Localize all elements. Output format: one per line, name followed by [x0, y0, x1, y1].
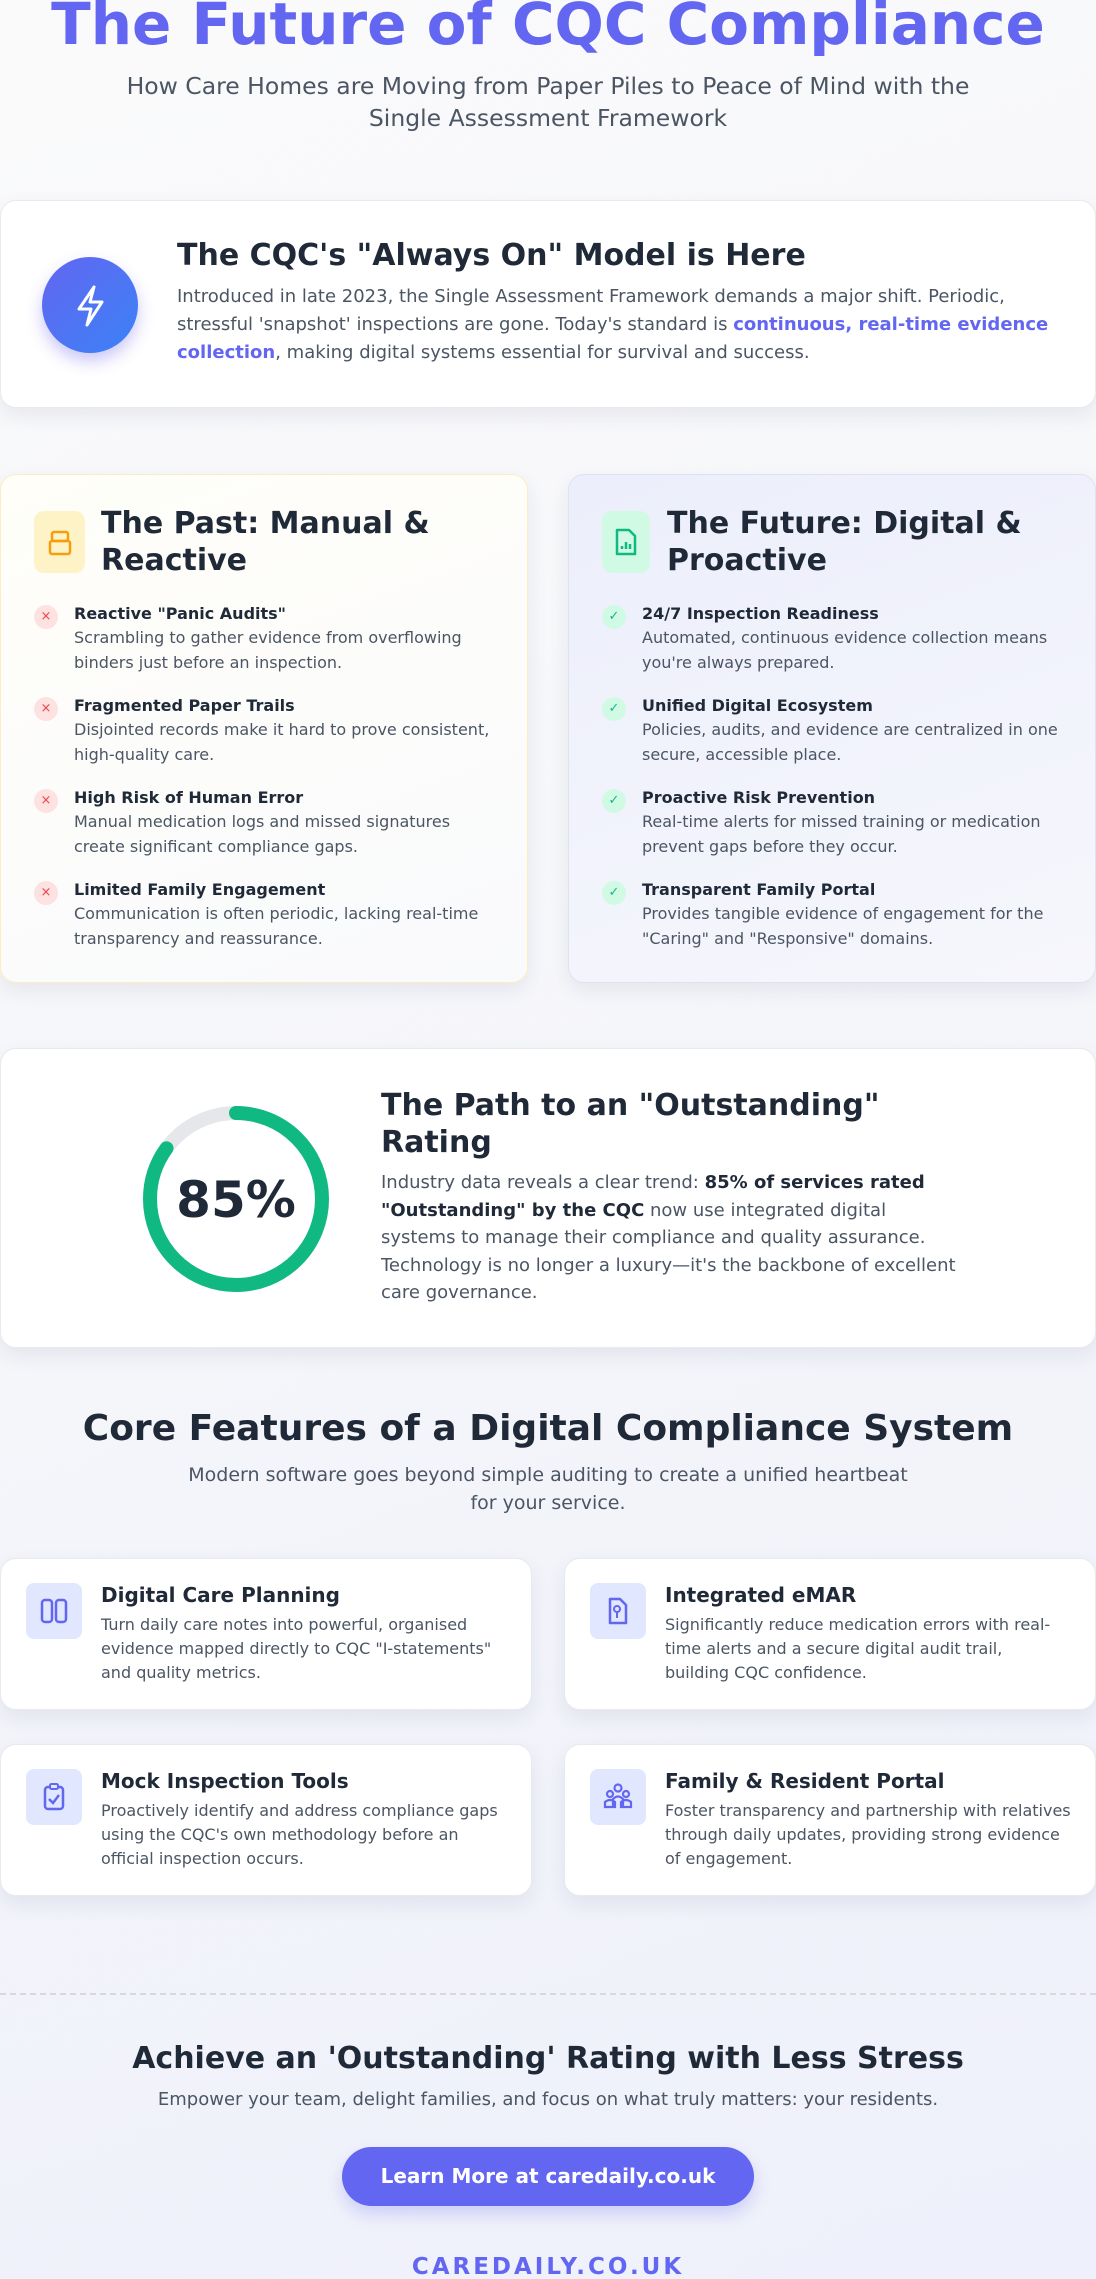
- item: Communication is often periodic, lacking real-time transparency and reassurance.: [74, 904, 478, 948]
- feature card: family portal: Foster transparency and partnership with relatives through daily updates, providing strong evidence of engagement.: [665, 1801, 1071, 1868]
- item: ✓: [609, 701, 619, 716]
- icon: archive: [34, 511, 85, 573]
- feature card: digital care planning: Digital Care Planning: [101, 1583, 340, 1607]
- item: ×: [41, 701, 51, 716]
- chart: 85% ring: 85%: [176, 1171, 296, 1229]
- feature card: mock inspection: [0, 1744, 532, 1896]
- feature card: digital care planning: Turn daily care notes into powerful, organised evidence mapped directly to CQC "I-statements" and quality metrics.: [101, 1615, 491, 1682]
- item: Provides tangible evidence of engagement for the "Caring" and "Responsive" domains.: [642, 904, 1043, 948]
- cta button: [342, 2147, 754, 2206]
- item: [34, 696, 489, 764]
- body text: Introduced in late 2023, the Single Assessment Framework demands a major shift. Periodic, stressful 'snapshot' inspections are gone. Today's standard is continuous, real-time evidence collection, making digital systems essential for survival and success.: [177, 286, 1048, 363]
- item: [602, 604, 1047, 672]
- panel: the past: [0, 474, 528, 983]
- item: Policies, audits, and evidence are centralized in one secure, accessible place.: [642, 720, 1058, 764]
- cta subtext: Empower your team, delight families, and focus on what truly matters: your residents.: [158, 2089, 938, 2110]
- panel: outstanding stat: [0, 1048, 1096, 1348]
- feature card: family portal: Family & Resident Portal: [665, 1769, 944, 1793]
- feature card: emar: Integrated eMAR: [665, 1583, 856, 1607]
- item: ×: [41, 885, 51, 900]
- feature card: family portal: [564, 1744, 1096, 1896]
- icon: clipboard check: [26, 1769, 82, 1825]
- item: High Risk of Human Error: [74, 788, 303, 807]
- item: ✓: [609, 793, 619, 808]
- item: [602, 880, 1043, 948]
- heading: The CQC's "Always On" Model is Here: [177, 238, 806, 273]
- list: future benefits: [602, 604, 1058, 948]
- chart: 85% ring: [143, 1106, 329, 1292]
- list: past problems: [34, 604, 489, 948]
- body text: Industry data reveals a clear trend: 85% of services rated "Outstanding" by the CQC now use integrated digital systems to manage their compliance and quality assurance. Technology is no longer a luxury—it's the backbone of excellent care governance.: [381, 1172, 956, 1303]
- heading: The Future: Digital & Proactive: [667, 506, 1022, 578]
- heading: The Past: Manual & Reactive: [101, 506, 430, 578]
- item: [34, 604, 462, 672]
- feature card: mock inspection: Proactively identify and address compliance gaps using the CQC's own methodology before an official inspection occurs.: [101, 1801, 498, 1868]
- item: Transparent Family Portal: [642, 880, 875, 899]
- item: [34, 880, 478, 948]
- feature card: digital care planning: [0, 1558, 532, 1710]
- item: Scrambling to gather evidence from overflowing binders just before an inspection.: [74, 628, 462, 672]
- item: 24/7 Inspection Readiness: [642, 604, 879, 623]
- panel: always on model: [0, 200, 1096, 408]
- item: Limited Family Engagement: [74, 880, 325, 899]
- item: Proactive Risk Prevention: [642, 788, 875, 807]
- item: ✓: [609, 885, 619, 900]
- cta heading: Achieve an 'Outstanding' Rating with Less Stress: [132, 2041, 964, 2076]
- item: ✓: [609, 609, 619, 624]
- item: [602, 696, 1058, 764]
- feature card: emar: [564, 1558, 1096, 1710]
- cta button: Learn More at caredaily.co.uk: [381, 2164, 715, 2188]
- subheading: Modern software goes beyond simple auditing to create a unified heartbeat for your service.: [188, 1464, 908, 1514]
- item: ×: [41, 793, 51, 808]
- item: Fragmented Paper Trails: [74, 696, 295, 715]
- icon: document chart: [602, 511, 650, 573]
- icon: people: [590, 1769, 646, 1825]
- icon: medication file: [590, 1583, 646, 1639]
- item: [34, 788, 450, 856]
- icon: lightning: [42, 257, 138, 353]
- panel: the future: [568, 474, 1096, 983]
- item: Disjointed records make it hard to prove consistent, high-quality care.: [74, 720, 489, 764]
- item: Manual medication logs and missed signatures create significant compliance gaps.: [74, 812, 450, 856]
- feature card: emar: Significantly reduce medication errors with real-time alerts and a secure digital audit trail, building CQC confidence.: [665, 1615, 1050, 1682]
- icon: columns: [26, 1583, 82, 1639]
- heading: core features: Core Features of a Digital Compliance System: [83, 1408, 1013, 1449]
- item: Unified Digital Ecosystem: [642, 696, 873, 715]
- feature card: mock inspection: Mock Inspection Tools: [101, 1769, 349, 1793]
- item: ×: [41, 609, 51, 624]
- item: Reactive "Panic Audits": [74, 604, 286, 623]
- heading: The Path to an "Outstanding" Rating: [381, 1088, 879, 1160]
- item: [602, 788, 1041, 856]
- subtitle: How Care Homes are Moving from Paper Piles to Peace of Mind with the Single Assessment Framework: [127, 72, 969, 132]
- item: Real-time alerts for missed training or medication prevent gaps before they occur.: [642, 812, 1041, 856]
- item: Automated, continuous evidence collection means you're always prepared.: [642, 628, 1047, 672]
